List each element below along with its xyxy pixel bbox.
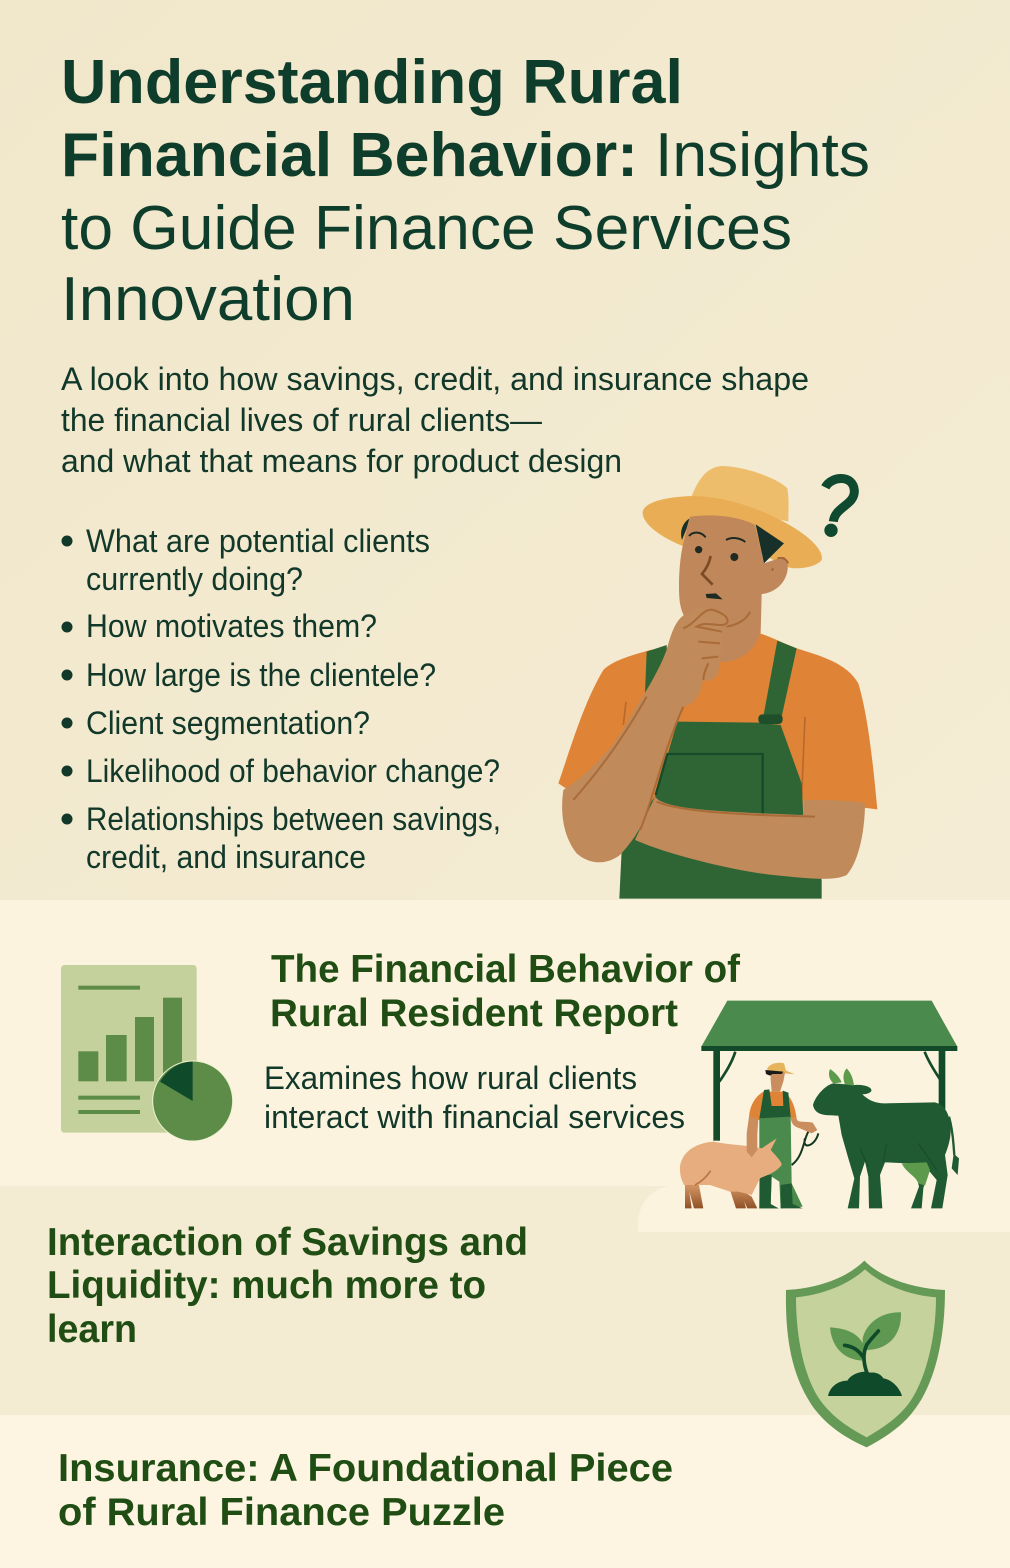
text block: report description: interact with financial services bbox=[264, 1099, 685, 1135]
bullet list: research questions bbox=[62, 523, 501, 875]
subtitle: the financial lives of rural clients— bbox=[61, 402, 542, 438]
subtitle bbox=[61, 361, 809, 479]
icon: farmer with pig and cow under shelter bbox=[680, 1001, 959, 1208]
title: Innovation bbox=[61, 265, 355, 334]
icon: report with charts bbox=[61, 965, 233, 1141]
heading: report bbox=[270, 948, 741, 1035]
subtitle: A look into how savings, credit, and insurance shape bbox=[61, 361, 809, 397]
bullet list: research questions: How motivates them? bbox=[86, 608, 377, 644]
bullet list: research questions: Relationships between savings, bbox=[86, 801, 501, 837]
title: to Guide Finance Services bbox=[61, 194, 792, 263]
heading: report: Rural Resident Report bbox=[270, 992, 678, 1035]
title: Insights bbox=[655, 121, 870, 190]
panel: insurance band background bbox=[0, 1415, 1010, 1568]
panel: header background bbox=[0, 0, 1010, 900]
title: Understanding Rural bbox=[61, 48, 683, 117]
shelter bbox=[701, 1001, 957, 1141]
text block: report description bbox=[264, 1060, 685, 1135]
bullet list: research questions: Client segmentation? bbox=[86, 705, 370, 741]
icon: thinking farmer bbox=[558, 466, 877, 899]
heading: savings and liquidity: learn bbox=[47, 1308, 137, 1351]
heading: savings and liquidity: Interaction of Savings and bbox=[47, 1221, 528, 1264]
bullet list: research questions: What are potential clients bbox=[86, 523, 430, 559]
heading: insurance: of Rural Finance Puzzle bbox=[58, 1491, 505, 1534]
heading: savings and liquidity: Liquidity: much more to bbox=[47, 1264, 486, 1307]
text block: report description: Examines how rural clients bbox=[264, 1060, 637, 1096]
title: Financial Behavior: bbox=[61, 121, 638, 190]
panel: report band background bbox=[0, 900, 1010, 1186]
crossed forearm bbox=[635, 797, 865, 879]
heading: insurance: Insurance: A Foundational Piece bbox=[58, 1447, 673, 1490]
farmer head bbox=[679, 515, 788, 662]
heading: insurance bbox=[58, 1447, 673, 1534]
decorative cream blob behind the barn bbox=[638, 1186, 1010, 1232]
farmer overalls bbox=[619, 641, 822, 899]
bullet list: research questions: currently doing? bbox=[86, 561, 303, 597]
farmer shirt bbox=[558, 633, 877, 817]
subtitle: and what that means for product design bbox=[61, 443, 622, 479]
icon: question mark bbox=[824, 478, 854, 537]
farmer hat bbox=[643, 466, 822, 568]
small farmer and pig bbox=[680, 1063, 818, 1208]
title bbox=[61, 48, 870, 334]
cow bbox=[813, 1068, 959, 1208]
bullet list: research questions: How large is the clientele? bbox=[86, 657, 436, 693]
bullet list: research questions: credit, and insurance bbox=[86, 839, 366, 875]
heading: report: The Financial Behavior of bbox=[271, 948, 741, 991]
icon: shield with seedling bbox=[786, 1261, 945, 1447]
heading: savings and liquidity bbox=[47, 1221, 528, 1351]
panel: savings band background bbox=[0, 1186, 1010, 1415]
raised arm and hand bbox=[562, 607, 728, 862]
bullet list: research questions: Likelihood of behavior change? bbox=[86, 753, 500, 789]
